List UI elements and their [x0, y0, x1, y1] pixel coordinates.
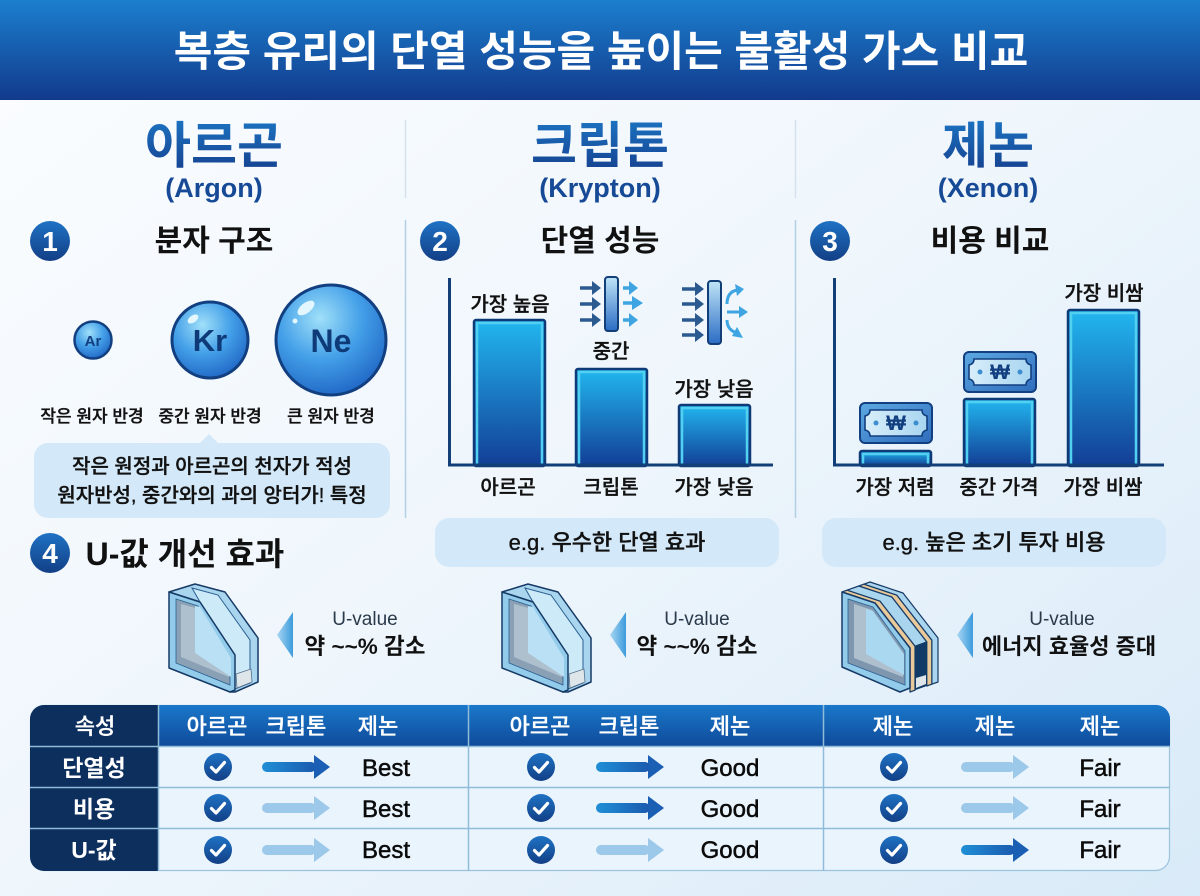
number badge 4: [30, 533, 70, 573]
atom radius labels: 작은 원자 반경: [40, 407, 144, 426]
header labels: 제논: [1080, 714, 1120, 739]
heading: Krypton: [531, 118, 669, 203]
atom: Ar: [74, 322, 112, 358]
bar chart: insulation: 중간: [593, 340, 629, 363]
U-value text, argon: 약 ~~% 감소: [305, 634, 425, 659]
callout: atom note: 작은 원정과 아르곤의 천자가 적성: [72, 455, 352, 478]
icon: heat blocked by glass: [682, 281, 748, 344]
row: cost: Good: [701, 796, 759, 823]
U-value text, xenon: [982, 609, 1156, 659]
panel 4 heading: U-값 개선 효과: [86, 536, 284, 572]
number badge 3: [810, 221, 850, 261]
row: U-value: U-값: [71, 837, 117, 863]
U-value text, argon: [305, 609, 425, 659]
atom radius labels: 중간 원자 반경: [158, 407, 262, 426]
callout: cost example: e.g. 높은 초기 투자 비용: [882, 530, 1106, 555]
number badge 1: 1: [42, 226, 58, 257]
row: U-value: Best: [362, 837, 410, 864]
heading: Argon: 아르곤: [145, 118, 283, 174]
number badge 2: 2: [432, 226, 448, 257]
header labels: [75, 714, 1120, 739]
header labels: 크립톤: [599, 714, 659, 739]
row: insulation: 단열성: [62, 755, 126, 781]
bar chart: cost: [834, 278, 1164, 499]
row: cost: 비용: [73, 796, 115, 822]
callout: atom note: 원자반성, 중간와의 과의 앙터가! 특정: [57, 484, 367, 507]
header labels: 속성: [75, 714, 115, 739]
heading: Xenon: 제논: [942, 118, 1034, 174]
row: insulation: [62, 753, 1121, 782]
header labels: 제논: [358, 714, 398, 739]
bar chart: insulation: [450, 278, 773, 499]
bar chart: cost: 중간 가격: [959, 476, 1039, 499]
row: U-value: Fair: [1079, 837, 1121, 864]
row: cost: [73, 794, 1121, 823]
callout: insulation example: e.g. 우수한 단열 효과: [509, 530, 705, 555]
U-value text, krypton: [637, 609, 757, 659]
panel 4: U-value improvement: [30, 533, 1156, 692]
U-value arrow, krypton: [610, 612, 626, 658]
row: cost: Fair: [1079, 796, 1121, 823]
row header column: [30, 705, 158, 871]
row: insulation: Good: [701, 755, 759, 782]
number badge 1: [30, 221, 70, 261]
panel 2: insulation performance: [420, 221, 779, 567]
icon: heat through glass, moderate: [580, 277, 643, 331]
panel 3: cost comparison: [810, 221, 1166, 567]
icon: won banknote low: [860, 403, 932, 443]
row: insulation: Best: [362, 755, 410, 782]
header labels: 제논: [710, 714, 750, 739]
bar chart: insulation: 크립톤: [583, 476, 639, 499]
U-value text, krypton: 약 ~~% 감소: [637, 634, 757, 659]
header labels: 아르곤: [187, 714, 247, 739]
U-value text, krypton: U-value: [664, 609, 730, 630]
U-value text, xenon: U-value: [1029, 609, 1095, 630]
bar chart: cost: 가장 비쌈: [1063, 476, 1143, 499]
heading: Krypton: 크립톤: [531, 118, 669, 174]
icon: triple glazed window, xenon: [842, 582, 938, 692]
panel 1: molecular structure: [30, 221, 390, 518]
atom: Kr: Kr: [193, 323, 227, 358]
header labels: 아르곤: [510, 714, 570, 739]
bar chart: insulation: 가장 낮음: [674, 378, 754, 401]
row: U-value: Good: [701, 837, 759, 864]
atom: Ar: Ar: [85, 333, 101, 350]
icon: double glazed window, argon: [169, 584, 258, 692]
number badge 2: [420, 221, 460, 261]
panel 1 heading: 분자 구조: [155, 225, 273, 258]
heading: Xenon: [938, 118, 1038, 203]
panel 2 heading: 단열 성능: [541, 225, 659, 258]
U-value arrow, argon: [277, 612, 293, 658]
bar chart: insulation: 아르곤: [480, 476, 536, 499]
bar chart: cost: 가장 저렴: [855, 476, 935, 499]
title: 복층 유리의 단열 성능을 높이는 불활성 가스 비교: [174, 28, 1028, 75]
panel 3 heading: 비용 비교: [931, 225, 1049, 258]
header banner: [0, 0, 1200, 100]
row: insulation: Fair: [1079, 755, 1121, 782]
number badge 4: 4: [42, 538, 58, 569]
number badge 3: 3: [822, 226, 838, 257]
table body: [30, 706, 1170, 870]
bar chart: insulation: 가장 높음: [470, 293, 550, 316]
atom: Kr: [172, 302, 248, 378]
atom radius labels: 큰 원자 반경: [287, 407, 375, 426]
heading: Argon: (Argon): [165, 173, 263, 203]
heading: Argon: [145, 118, 283, 203]
header labels: 크립톤: [266, 714, 326, 739]
atom: Ne: [276, 285, 386, 395]
header labels: 제논: [873, 714, 913, 739]
atom radius labels: [40, 407, 375, 426]
row: cost: Best: [362, 796, 410, 823]
callout: atom note: [34, 434, 390, 518]
bar chart: cost: 가장 비쌈: [1064, 282, 1144, 305]
callout: cost example: [822, 518, 1166, 567]
U-value text, xenon: 에너지 효율성 증대: [982, 634, 1156, 659]
atom: Ne: Ne: [311, 323, 351, 359]
heading: Krypton: (Krypton): [539, 173, 661, 203]
U-value arrow, xenon: [957, 612, 973, 658]
icon: double glazed window, krypton: [502, 584, 591, 692]
comparison table: [30, 705, 1170, 871]
row: U-value: [71, 836, 1121, 864]
callout: insulation example: [435, 518, 779, 567]
icon: won banknote medium: [964, 352, 1036, 392]
bar chart: insulation: 가장 낮음: [674, 476, 754, 499]
header labels: 제논: [975, 714, 1015, 739]
heading: Xenon: (Xenon): [938, 173, 1038, 203]
table header row: [158, 705, 1170, 746]
U-value text, argon: U-value: [332, 609, 398, 630]
